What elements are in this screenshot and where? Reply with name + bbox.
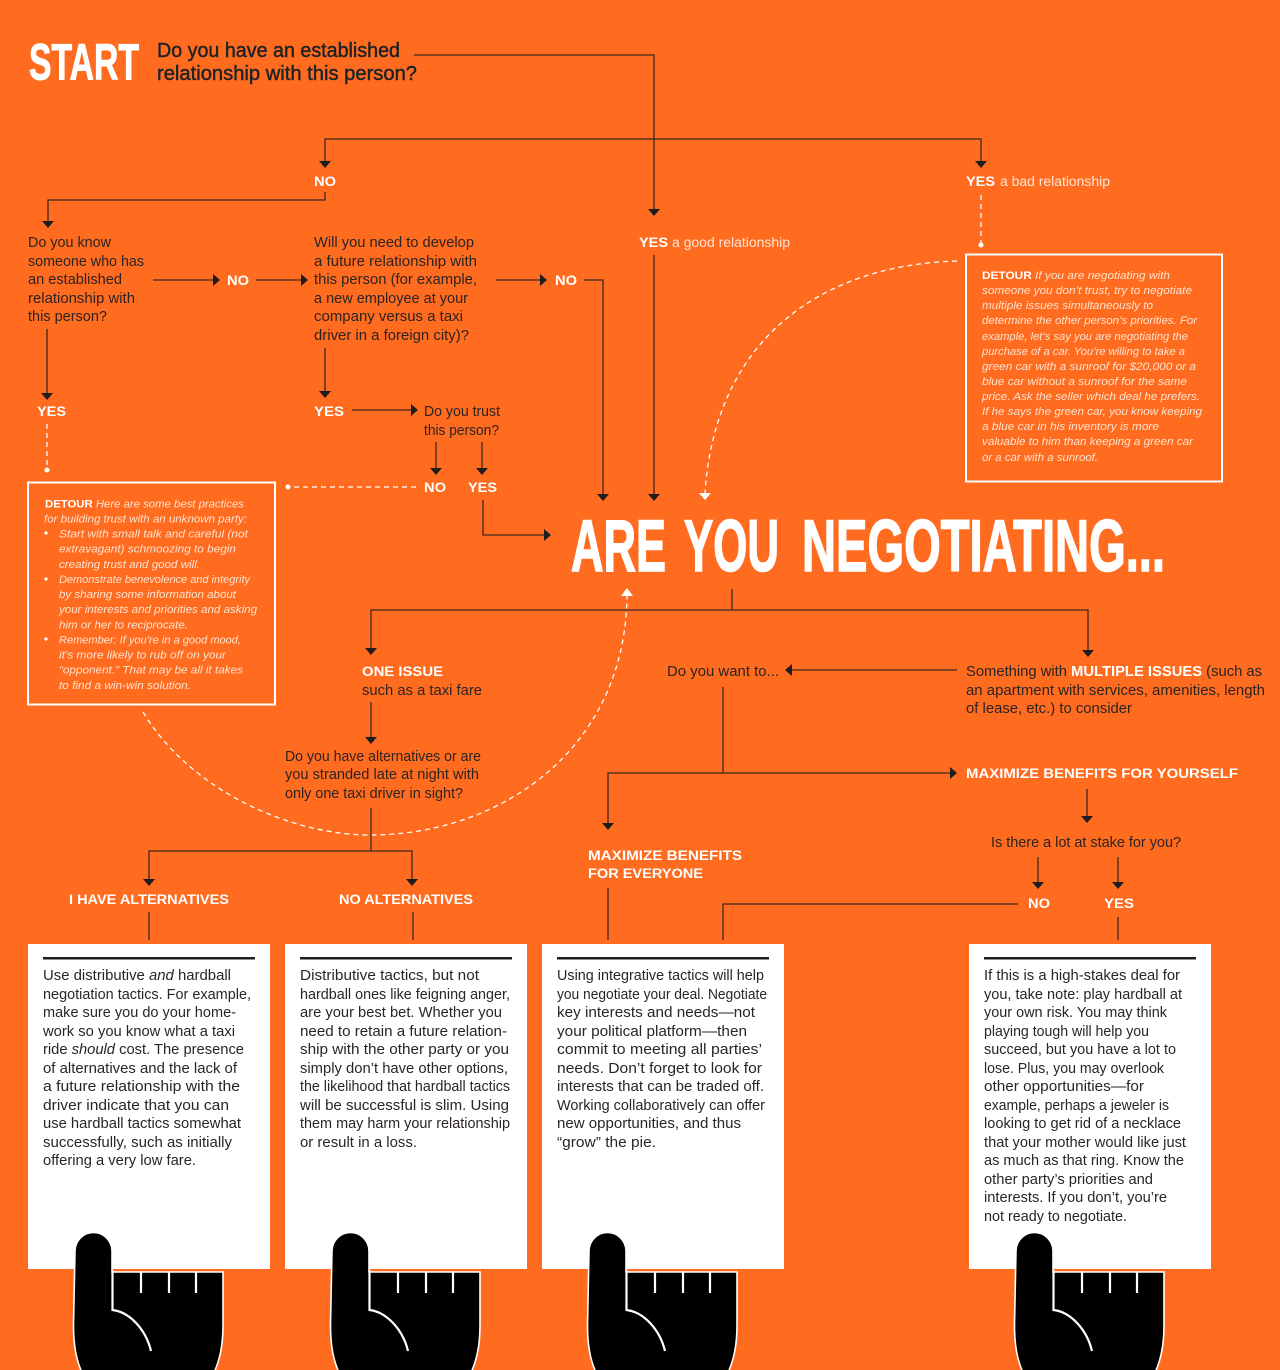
question: do you know someone: an established xyxy=(28,272,122,288)
title: START: START xyxy=(29,34,139,90)
panel: card 1: make sure you do your home- xyxy=(43,1005,236,1021)
dashed curve: right detour to negotiating xyxy=(699,261,957,500)
question: alternatives xyxy=(285,749,481,802)
panel: left detour: Remember: If you’re in a good mood, xyxy=(59,634,241,646)
question: future relationship: company versus a taxi xyxy=(314,309,463,325)
label: maximize benefits for everyone xyxy=(588,848,742,882)
label: maximize benefits for everyone: FOR EVERYONE xyxy=(588,866,703,882)
arrow: no to are you negotiating xyxy=(584,280,609,501)
question: future relationship xyxy=(314,235,477,344)
panel: right detour: green car with a sunroof for $20,000 or a xyxy=(982,361,1196,373)
dotted connector to left detour xyxy=(44,424,50,472)
arrow: know to no xyxy=(153,274,220,286)
panel: left detour: Start with small talk and careful (not xyxy=(59,528,249,540)
label: YES a bad relationship: YES xyxy=(966,174,995,190)
panel: card 2 xyxy=(285,944,527,1269)
panel: left detour: by sharing some information about xyxy=(59,589,237,601)
panel: left detour xyxy=(28,482,275,704)
label: NO middle: NO xyxy=(227,273,249,289)
question: do you know someone xyxy=(28,235,144,325)
label: YES trust: YES xyxy=(468,480,497,496)
panel: card 4: example, perhaps a jeweler is xyxy=(984,1098,1169,1114)
panel: right detour: If he says the green car, you know keeping xyxy=(982,406,1203,418)
label: NO trust: NO xyxy=(424,480,446,496)
panel: card 4: your own risk. You may think xyxy=(984,1005,1168,1021)
question: future relationship: a new employee at your xyxy=(314,291,468,307)
panel: right detour: price. Ask the seller which deal he prefers. xyxy=(981,391,1200,403)
panel: card 4: If this is a high-stakes deal for xyxy=(984,968,1180,984)
question: do you trust: Do you trust xyxy=(424,404,500,420)
panel: card 1: driver indicate that you can xyxy=(43,1098,229,1114)
panel: card 1: Use distributive and hardball xyxy=(43,968,231,984)
panel: card 3: Working collaboratively can offer xyxy=(557,1098,765,1114)
arrow: future to yes xyxy=(319,348,331,398)
question: do you know someone: Do you know xyxy=(28,235,111,251)
panel: card 4: succeed, but you have a lot to xyxy=(984,1042,1176,1058)
panel: card 3: Using integrative tactics will help xyxy=(557,968,764,984)
panel: card 3: interests that can be traded off. xyxy=(557,1079,764,1095)
panel: right detour: purchase of a car. You’re willing to take a xyxy=(981,346,1185,358)
label: YES a good relationship: YES xyxy=(639,235,668,251)
panel: card 2: them may harm your relationship xyxy=(300,1116,510,1132)
panel: right detour: someone you don’t trust, try to negotiate xyxy=(982,285,1192,297)
label: multiple issues: of lease, etc.) to consider xyxy=(966,701,1132,717)
question: future relationship: this person (for example, xyxy=(314,272,477,288)
panel: left detour: Demonstrate benevolence and integrity xyxy=(59,574,251,586)
question: stake: Is there a lot at stake for you? xyxy=(991,835,1181,851)
panel: card 3: commit to meeting all parties’ xyxy=(557,1042,762,1058)
arrow: start to good relationship xyxy=(414,55,660,216)
arrow: split to no and yes bad relationship xyxy=(319,139,987,168)
starting question xyxy=(157,40,417,85)
label: multiple issues: Something with MULTIPLE ISSUES (such as xyxy=(966,664,1262,680)
panel: right detour: blue car without a sunroof for the same xyxy=(982,376,1187,388)
arrow: want split xyxy=(602,687,957,830)
label: one issue: ONE ISSUE xyxy=(362,664,443,680)
arrow: yourself to stake xyxy=(1081,789,1093,823)
panel: card 2: will be successful is slim. Using xyxy=(299,1098,509,1114)
panel: card 2: or result in a loss. xyxy=(300,1135,417,1151)
panel: card 1: work so you know what a taxi xyxy=(42,1024,235,1040)
panel: left detour: him or her to reciprocate. xyxy=(59,620,188,632)
connector: no to integrative card xyxy=(723,904,1018,940)
arrow: yes to negotiating xyxy=(483,500,551,541)
arrow: stake to no xyxy=(1032,857,1044,889)
question: do you trust xyxy=(424,404,500,439)
icon: pointing hand 4 xyxy=(1014,1232,1164,1370)
panel: card 3: key interests and needs—not xyxy=(557,1005,755,1021)
panel: right detour: determine the other person’s priorities. For xyxy=(982,315,1198,327)
arrow: trust to yes xyxy=(476,442,488,475)
panel: card 1: of alternatives and the lack of xyxy=(43,1061,238,1077)
label: NO right: NO xyxy=(555,273,577,289)
connector: alternatives to card xyxy=(148,912,150,940)
question: do you know someone: relationship with xyxy=(28,291,135,307)
label: YES a good relationship: a good relationship xyxy=(672,235,790,251)
arrow: future to no xyxy=(496,274,547,286)
panel: card 3: new opportunities, and thus xyxy=(557,1116,741,1132)
panel: card 4: that your mother would like just xyxy=(984,1135,1186,1151)
question: future relationship: a future relationship with xyxy=(314,254,477,270)
arrow: alternatives split xyxy=(143,808,418,886)
panel: card 2: ship with the other party or you xyxy=(300,1042,509,1058)
panel: left detour: for building trust with an unknown party: xyxy=(44,514,247,526)
panel: card 4: other party’s priorities and xyxy=(984,1172,1153,1188)
panel: card 4: interests. If you don’t, you’re xyxy=(984,1190,1167,1206)
label: one issue xyxy=(362,664,482,699)
panel: card 4: not ready to negotiate. xyxy=(984,1209,1127,1225)
panel: card 2: are your best bet. Whether you xyxy=(300,1005,502,1021)
panel: left detour: creating trust and good will. xyxy=(59,559,200,571)
panel: left detour: extravagant) schmoozing to begin xyxy=(59,544,236,556)
panel: card 4: lose. Plus, you may overlook xyxy=(984,1061,1165,1077)
panel: card 1: negotiation tactics. For example, xyxy=(43,987,251,1003)
label: YES stake: YES xyxy=(1104,896,1134,912)
panel: right detour: DETOUR If you are negotiating with xyxy=(982,270,1170,282)
label: multiple issues xyxy=(966,664,1265,717)
heading: are you negotiating: ARE xyxy=(571,506,666,587)
panel: left detour: it’s more likely to rub off on your xyxy=(59,650,227,662)
label: NO stake: NO xyxy=(1028,896,1050,912)
panel: card 3: “grow” the pie. xyxy=(557,1135,656,1151)
dotted connector to right detour xyxy=(978,195,984,248)
starting question: Do you have an established xyxy=(157,40,400,62)
panel: right detour: multiple issues simultaneously to xyxy=(982,300,1153,312)
panel: right detour: a blue car in his inventory is more xyxy=(982,421,1159,433)
connector: no alternatives to card xyxy=(412,912,414,940)
question: do you trust: this person? xyxy=(424,423,499,439)
question: do you know someone: this person? xyxy=(28,309,107,325)
panel: left detour: your interests and priorities and asking xyxy=(58,604,258,616)
panel: right detour: or a car with a sunroof. xyxy=(982,452,1098,464)
panel: card 1 xyxy=(28,944,270,1269)
label: no alternatives: NO ALTERNATIVES xyxy=(339,892,473,908)
panel: left detour: DETOUR Here are some best practices xyxy=(45,498,244,510)
arrow: multiple issues to want xyxy=(785,664,957,676)
question: alternatives: you stranded late at night with xyxy=(285,767,479,783)
panel: card 2: hardball ones like feigning anger, xyxy=(300,987,510,1003)
panel: card 3: you negotiate your deal. Negotiate xyxy=(557,987,767,1003)
label: YES left: YES xyxy=(37,404,66,420)
connector: yes to hardball card xyxy=(1117,917,1119,940)
label: YES middle: YES xyxy=(314,404,344,420)
panel: left detour: to find a win-win solution. xyxy=(59,680,191,692)
starting question: relationship with this person? xyxy=(157,63,417,85)
arrow: yes to trust xyxy=(352,404,418,416)
heading: are you negotiating: YOU xyxy=(684,506,779,587)
panel: card 4 xyxy=(969,944,1211,1269)
question: do you know someone: someone who has xyxy=(28,254,144,270)
panel: right detour: valuable to him than keeping a green car xyxy=(982,436,1194,448)
panel: card 1: offering a very low fare. xyxy=(43,1153,196,1169)
panel: card 3: needs. Don’t forget to look for xyxy=(557,1061,762,1077)
panel: card 4: looking to get rid of a necklace xyxy=(984,1116,1181,1132)
arrow: know to yes xyxy=(41,329,53,400)
arrow: stake to yes xyxy=(1112,857,1124,889)
label: NO: NO xyxy=(314,174,336,190)
panel: card 2: need to retain a future relation- xyxy=(300,1024,507,1040)
heading: are you negotiating xyxy=(571,506,1165,587)
connector: everyone to card xyxy=(607,888,609,940)
icon: pointing hand 2 xyxy=(330,1232,480,1370)
label: one issue: such as a taxi fare xyxy=(362,683,482,699)
panel: card 2: the likelihood that hardball tactics xyxy=(300,1079,510,1095)
panel: right detour xyxy=(966,254,1222,482)
label: I have alternatives: I HAVE ALTERNATIVES xyxy=(69,892,229,908)
arrow: one issue to alternatives xyxy=(365,702,377,744)
arrow: no to do you know xyxy=(42,192,325,228)
panel: card 4: as much as that ring. Know the xyxy=(984,1153,1184,1169)
panel: card 1: use hardball tactics somewhat xyxy=(43,1116,241,1132)
label: maximize benefits for everyone: MAXIMIZE BENEFITS xyxy=(588,848,742,864)
panel: card 2: Distributive tactics, but not xyxy=(300,968,479,984)
label: maximize benefits for yourself: MAXIMIZE BENEFITS FOR YOURSELF xyxy=(966,766,1238,782)
panel: card 3 xyxy=(542,944,784,1269)
icon: pointing hand 3 xyxy=(588,1232,737,1370)
arrow: trust to no xyxy=(430,442,442,475)
arrow: good relationship to negotiating xyxy=(648,255,660,501)
dashed curve: left detour to negotiating xyxy=(143,588,633,835)
panel: card 2: simply don’t have other options, xyxy=(300,1061,508,1077)
panel: card 3: your political platform—then xyxy=(557,1024,747,1040)
panel: left detour: “opponent.” That may be all it takes xyxy=(59,664,243,676)
panel: card 1: ride should cost. The presence xyxy=(43,1042,244,1058)
label: YES a bad relationship: a bad relationship xyxy=(1000,174,1110,190)
panel: right detour: example, let’s say you are negotiating the xyxy=(982,331,1188,343)
panel: card 4: other opportunities—for xyxy=(984,1079,1144,1095)
label: multiple issues: an apartment with services, amenities, length xyxy=(966,683,1265,699)
question: future relationship: Will you need to develop xyxy=(314,235,474,251)
question: alternatives: only one taxi driver in sight? xyxy=(285,786,463,802)
panel: card 4: you, take note: play hardball at xyxy=(984,987,1182,1003)
dotted connector: no to left detour xyxy=(286,484,416,490)
panel: card 4: playing tough will help you xyxy=(984,1024,1149,1040)
panel: card 1: a future relationship with the xyxy=(43,1079,240,1095)
question: alternatives: Do you have alternatives or are xyxy=(285,749,481,765)
arrow: negotiating split xyxy=(365,589,1094,657)
arrow: no to future relationship xyxy=(256,274,308,286)
panel: card 1: successfully, such as initially xyxy=(43,1135,233,1151)
icon: pointing hand 1 xyxy=(74,1232,223,1370)
question: future relationship: driver in a foreign city)? xyxy=(314,328,469,344)
question: do you want to: Do you want to... xyxy=(667,664,779,680)
